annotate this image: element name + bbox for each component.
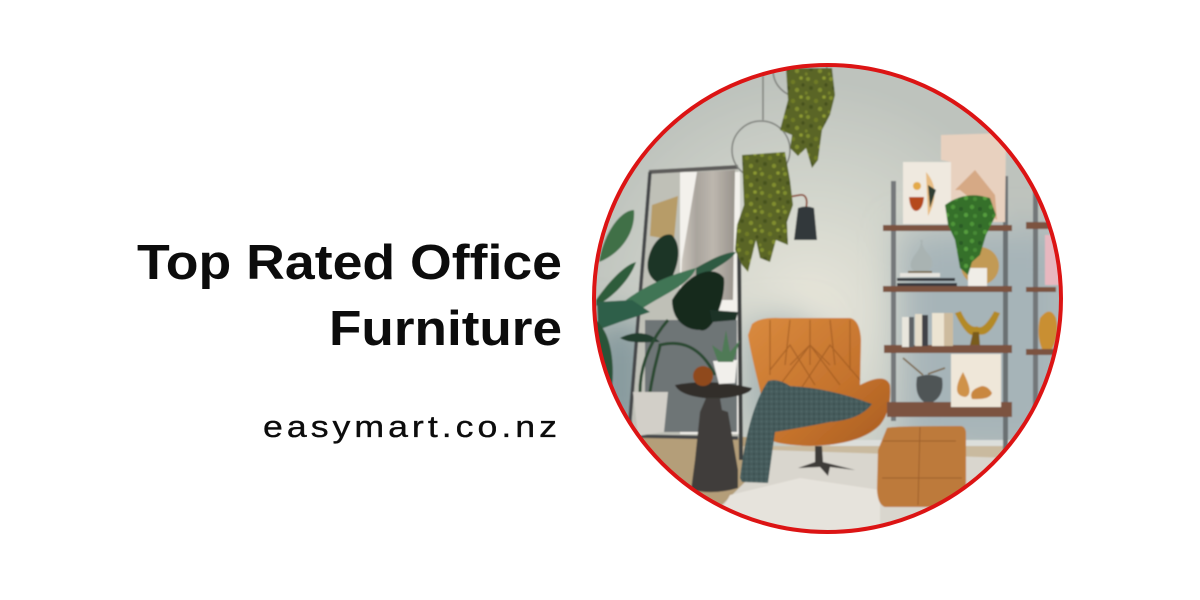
side table <box>675 330 752 492</box>
left shelving unit <box>883 176 1056 461</box>
floor and rug <box>642 436 1004 530</box>
wall art on shelves <box>903 133 1059 407</box>
wall <box>596 67 1059 447</box>
leather pouf <box>877 426 966 507</box>
large plant <box>595 210 738 436</box>
mirror <box>630 167 741 460</box>
title: Top Rated Office <box>137 236 562 290</box>
red ring <box>594 65 1061 532</box>
shelf decor <box>897 240 1057 402</box>
title: Furniture <box>329 302 562 356</box>
title <box>137 236 562 356</box>
knitted throw <box>740 380 872 483</box>
circular room photo <box>590 43 1070 540</box>
pendant lamp <box>790 193 818 241</box>
armchair <box>748 318 890 476</box>
hanging plants <box>735 68 835 272</box>
hanging green plant on shelf <box>945 195 996 275</box>
website address: easymart.co.nz <box>263 409 561 444</box>
hanging rings <box>730 67 828 174</box>
